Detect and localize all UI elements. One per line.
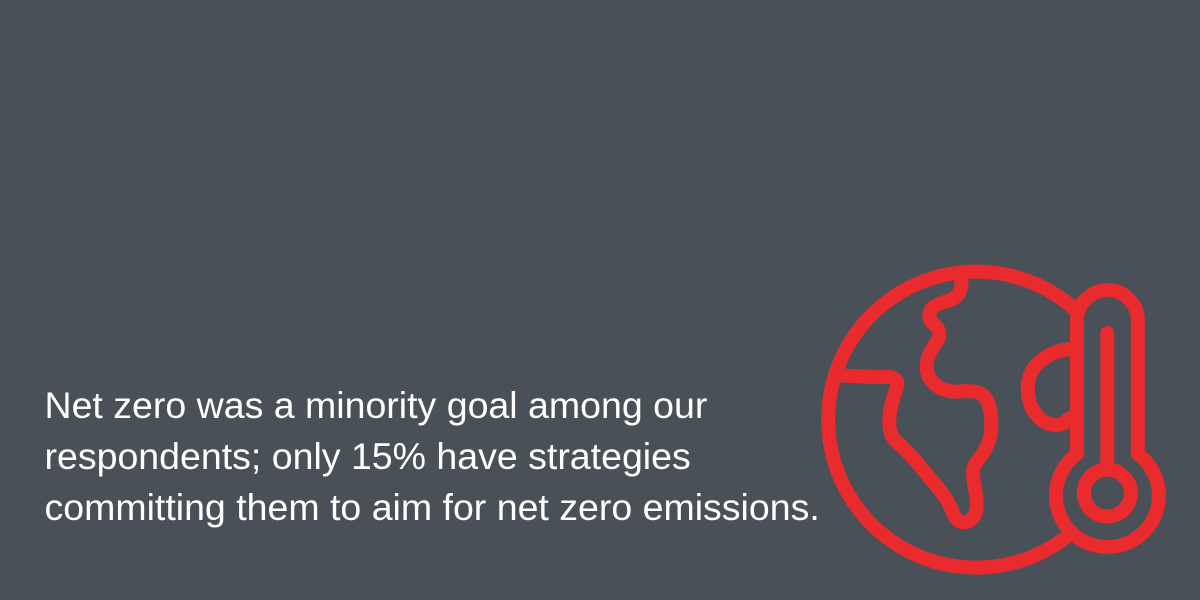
icon: thermometer body bbox=[1056, 290, 1159, 547]
icon: thermometer stem bbox=[1100, 333, 1114, 463]
icon: continent right bbox=[1028, 349, 1073, 425]
text block: net zero statement bbox=[44, 384, 820, 528]
icon: thermometer bulb bbox=[1084, 470, 1131, 516]
text block: net zero statement: respondents; only 15% have strategies bbox=[44, 435, 691, 477]
text block: net zero statement: Net zero was a minority goal among our bbox=[44, 384, 707, 426]
icon: globe outline bbox=[828, 272, 1076, 568]
icon: continent left bbox=[840, 273, 991, 522]
text block: net zero statement: committing them to aim for net zero emissions. bbox=[44, 486, 820, 528]
